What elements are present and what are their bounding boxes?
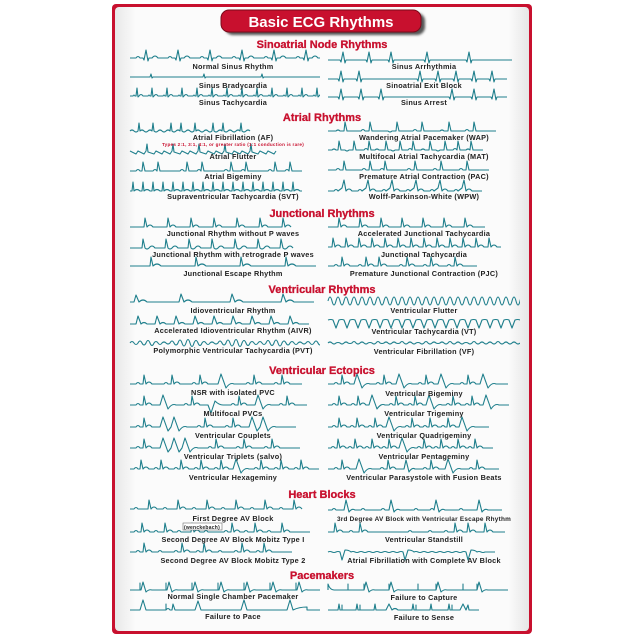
heading: junctional: Junctional Rhythms — [269, 208, 375, 220]
panel: ventricular right traces — [328, 297, 524, 344]
panel: pacemaker right traces — [328, 582, 508, 610]
labels: heart blocks: (wenckebach) — [184, 525, 220, 531]
panel: ectopic left traces — [130, 374, 319, 473]
labels: ectopics: NSR with isolated PVC — [191, 388, 275, 397]
labels: ectopics: Ventricular Couplets — [195, 431, 271, 440]
labels: ventricular: Ventricular Flutter — [390, 306, 458, 315]
labels: ventricular: Ventricular Tachycardia (VT) — [371, 327, 477, 336]
labels: atrial: Supraventricular Tachycardia (SVT) — [167, 192, 299, 201]
labels: heart blocks: Second Degree AV Block Mobitz Type I — [161, 535, 305, 544]
labels: atrial — [162, 133, 489, 201]
labels: junctional: Premature Junctional Contraction (PJC) — [350, 269, 498, 278]
labels: ectopics: Multifocal PVCs — [204, 409, 262, 418]
panel: ectopic right traces — [328, 374, 509, 473]
labels: ectopics: Ventricular Pentageminy — [379, 452, 470, 461]
labels: atrial: Atrial Fibrillation (AF) — [193, 133, 274, 142]
labels: ectopics: Ventricular Parasystole with Fusion Beats — [346, 473, 502, 482]
labels: ectopics: Ventricular Trigeminy — [384, 409, 464, 418]
labels: ectopics: Ventricular Bigeminy — [385, 389, 463, 398]
labels: sinoatrial: Sinus Tachycardia — [199, 98, 268, 107]
heading: ventricular ectopics: Ventricular Ectopics — [269, 365, 375, 377]
labels: atrial: Atrial Bigeminy — [204, 172, 262, 181]
labels: atrial: Wolff-Parkinson-White (WPW) — [369, 192, 480, 201]
labels: sinoatrial: Sinus Arrest — [401, 98, 447, 107]
labels: ectopics: Ventricular Triplets (salvo) — [184, 452, 282, 461]
labels: heart blocks: 3rd Degree AV Block with Ventricular Escape Rhythm — [337, 516, 511, 523]
labels: atrial: Atrial Flutter — [210, 152, 256, 161]
labels: heart blocks: First Degree AV Block — [192, 514, 274, 523]
labels: ventricular: Idioventricular Rhythm — [191, 306, 276, 315]
labels: junctional: Junctional Rhythm without P waves — [167, 229, 299, 238]
labels: sinoatrial — [193, 62, 463, 107]
labels: ectopics: Ventricular Quadrigeminy — [377, 431, 472, 440]
labels: heart blocks: Atrial Fibrillation with Complete AV Block — [347, 556, 501, 565]
title banner — [221, 10, 425, 35]
labels: ventricular: Accelerated Idioventricular Rhythm (AIVR) — [154, 326, 312, 335]
labels: pacemakers: Normal Single Chamber Pacemaker — [167, 592, 299, 601]
panel: heart block right traces — [328, 500, 505, 560]
panel: heart block left traces — [130, 500, 310, 552]
labels: atrial: Wandering Atrial Pacemaker (WAP) — [359, 133, 489, 142]
labels: ectopics: Ventricular Hexageminy — [189, 473, 278, 482]
labels: atrial: Premature Atrial Contraction (PAC) — [359, 172, 489, 181]
panel: ventricular left traces — [130, 294, 322, 346]
labels: pacemakers: Failure to Capture — [391, 593, 457, 602]
labels: junctional: Accelerated Junctional Tachycardia — [358, 229, 491, 238]
panel: atrial right traces — [328, 122, 496, 191]
labels: ventricular: Polymorphic Ventricular Tachycardia (PVT) — [153, 346, 313, 355]
heading: atrial: Atrial Rhythms — [283, 112, 361, 124]
labels: sinoatrial: Sinus Arrhythmia — [392, 62, 457, 71]
panel: junctional left traces — [130, 218, 316, 266]
labels: pacemakers: Failure to Sense — [394, 613, 454, 622]
panel: atrial left traces — [130, 123, 302, 191]
labels: atrial: Multifocal Atrial Tachycardia (MAT) — [359, 152, 489, 161]
poster frame — [112, 4, 532, 634]
panel: sinoatrial left traces — [130, 50, 325, 97]
heading: ventricular: Ventricular Rhythms — [269, 284, 375, 296]
labels: sinoatrial: Normal Sinus Rhythm — [193, 62, 274, 71]
labels: junctional — [152, 229, 498, 278]
labels: heart blocks: Ventricular Standstill — [385, 535, 463, 544]
labels: pacemakers — [167, 592, 457, 622]
panel: pacemaker left traces — [130, 582, 338, 610]
labels: ventricular: Ventricular Fibrillation (VF) — [374, 347, 475, 356]
title banner: Basic ECG Rhythms — [248, 14, 394, 31]
panel: junctional right traces — [328, 218, 501, 266]
labels: pacemakers: Failure to Pace — [205, 612, 261, 621]
panel: sinoatrial right traces — [328, 52, 512, 100]
labels: heart blocks — [160, 514, 511, 565]
labels: junctional: Junctional Escape Rhythm — [183, 269, 283, 278]
labels: sinoatrial: Sinus Bradycardia — [199, 81, 268, 90]
heading: pacemakers: Pacemakers — [290, 570, 354, 582]
labels: ventricular — [153, 306, 477, 356]
heading: heart blocks: Heart Blocks — [288, 489, 356, 501]
labels: ectopics — [184, 388, 502, 482]
labels: junctional: Junctional Tachycardia — [381, 250, 468, 259]
labels: junctional: Junctional Rhythm with retrograde P waves — [152, 250, 314, 259]
labels: atrial: Types 2:1, 3:1, 4:1, or greater ratio (1:1 conduction is rare) — [162, 142, 304, 147]
heading: sinoatrial: Sinoatrial Node Rhythms — [257, 39, 387, 51]
labels: sinoatrial: Sinoatrial Exit Block — [386, 81, 463, 90]
labels: heart blocks: Second Degree AV Block Mobitz Type 2 — [160, 556, 306, 565]
